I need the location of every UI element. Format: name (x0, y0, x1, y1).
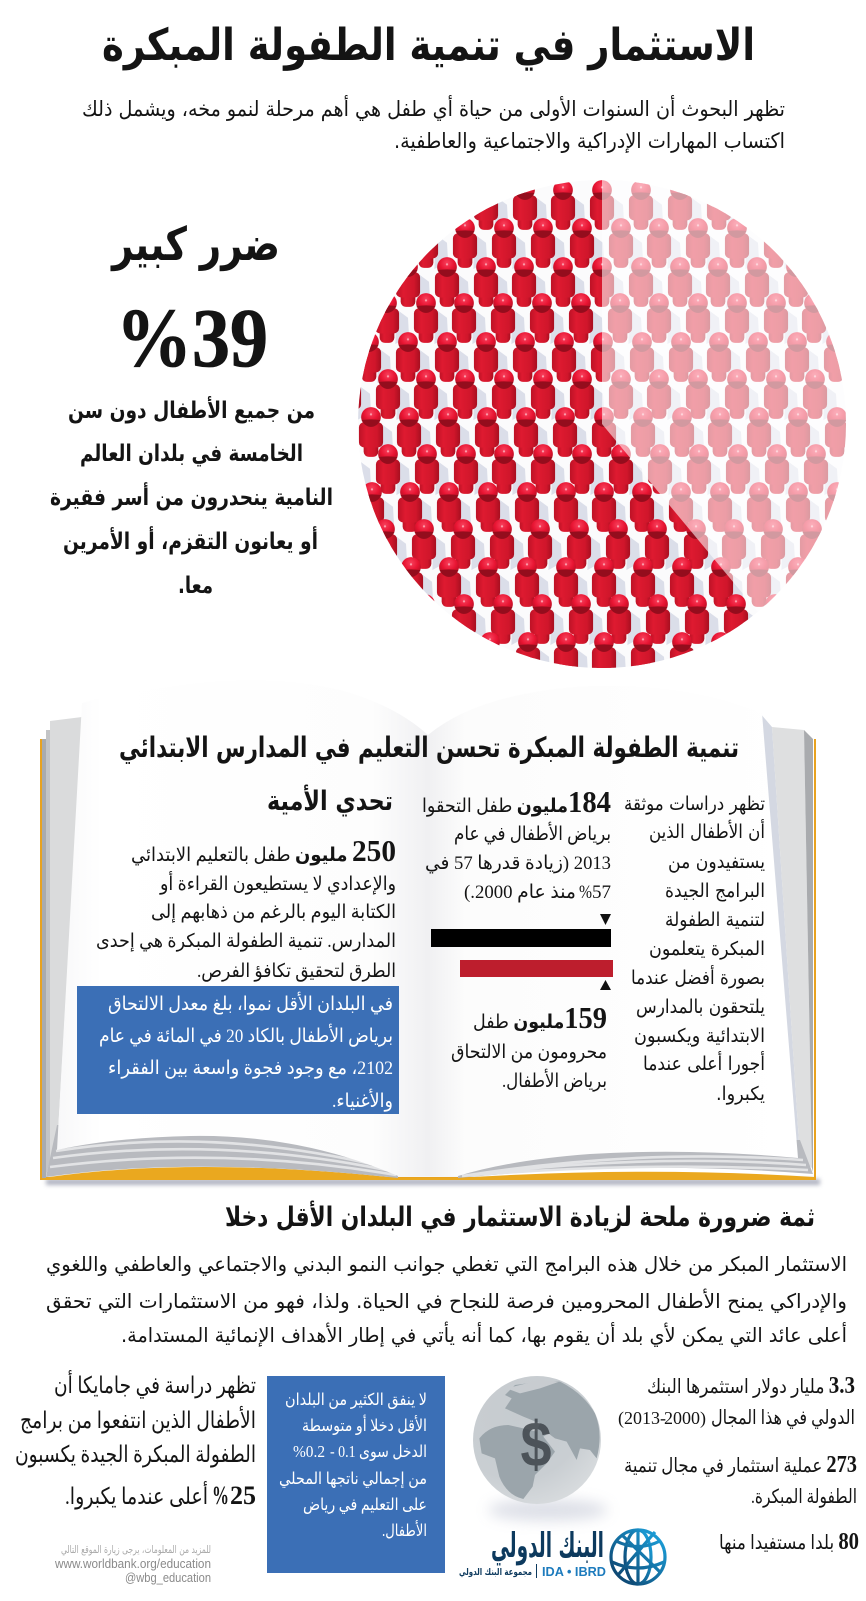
logo: World Bank (459, 1526, 665, 1584)
callout: low spending on preschool: الأقل دخلا أو متوسطة (302, 1414, 427, 1436)
column: documented studies: يلتحقون بالمدارس (636, 996, 765, 1018)
source and links: للمزيد من المعلومات، يرجى زيارة الموقع التالي (61, 1544, 211, 1556)
text block: 250 million children (96, 833, 396, 982)
column: 184 million enrolled: % (579, 882, 592, 903)
text block: World Bank statistics: 2000) (664, 1408, 706, 1429)
column: 159 million excluded: محرومون من الالتحاق (451, 1042, 607, 1063)
text block: Jamaica study: 25 (230, 1481, 256, 1510)
callout: least developed countries: برياض الأطفال بالكاد 20 في المائة في عام (99, 1024, 393, 1047)
text block: Jamaica study: تظهر دراسة في جامايكا أن (54, 1370, 256, 1399)
logo: World Bank: البنك الدولي (491, 1526, 604, 1566)
heading: severe harm: ضرر كبير (110, 217, 280, 271)
text block: Jamaica study: الطفولة المبكرة الجيدة يكسبون (15, 1442, 256, 1468)
text block: Jamaica study: الأطفال الذين انتفعوا من برامج (20, 1406, 256, 1434)
source and links: www.worldbank.org/education (54, 1556, 211, 1571)
logo: World Bank: IDA • IBRD (542, 1564, 606, 1579)
text block: 250 million children: الكتابة اليوم بالرغم من ذهابهم إلى (151, 902, 396, 924)
title: الاستثمار في تنمية الطفولة المبكرة (102, 20, 755, 71)
column: documented studies: أجورا أعلى عندما (643, 1051, 765, 1075)
callout: least developed countries (77, 986, 399, 1114)
callout: least developed countries: في البلدان الأقل نموا، بلغ معدل الالتحاق (108, 992, 393, 1015)
column: documented studies: تظهر دراسات موثقة (624, 793, 765, 815)
text block: stunting description: من جميع الأطفال دون سن (68, 395, 315, 424)
text block: stunting description: معا. (178, 573, 213, 599)
callout: low spending on preschool (267, 1376, 445, 1573)
column: 184 million enrolled: 2013 (زيادة قدرها 57 في (425, 853, 611, 874)
text block: Jamaica study: % (212, 1481, 229, 1510)
intro text: تظهر البحوث أن السنوات الأولى من حياة أي طفل هي أهم مرحلة لنمو مخه، ويشمل ذلك (82, 95, 785, 122)
column: 184 million enrolled: 57 (592, 882, 611, 903)
text block: 250 million children: الطرق لتحقيق تكافؤ الفرص. (197, 961, 396, 982)
callout: low spending on preschool: %0.2 (293, 1442, 325, 1461)
bar chart: enrolled versus excluded (431, 914, 613, 990)
text block: stunting description: الخامسة في بلدان العالم (80, 441, 303, 467)
text block: Jamaica study: أعلى عندما يكبروا. (65, 1481, 208, 1510)
callout: low spending on preschool: الأطفال. (382, 1520, 427, 1540)
column: documented studies: يستفيدون من (668, 851, 765, 873)
text block: 250 million children: المدارس. تنمية الطفولة المبكرة هي إحدى (96, 931, 396, 953)
intro text (82, 95, 785, 153)
column: 159 million excluded (451, 1000, 607, 1092)
pie chart: figures circle 39 percent (337, 180, 859, 683)
text block: World Bank statistics (618, 1373, 859, 1555)
column: 159 million excluded: برياض الأطفال. (502, 1069, 607, 1092)
icon: globe with dollar sign (473, 1376, 608, 1521)
callout: low spending on preschool: من إجمالي ناتجها المحلي (279, 1469, 427, 1489)
column: documented studies: يكبروا. (716, 1083, 765, 1105)
text block: 250 million children: والإعدادي لا يستطيعون القراءة أو (159, 871, 396, 895)
source and links (54, 1544, 211, 1585)
callout: low spending on preschool: الدخل سوى 0.1 - (330, 1442, 427, 1462)
column: documented studies: المبكرة يتعلمون (649, 938, 765, 960)
text block: 250 million children: 250 مليون طفل بالتعليم الابتدائي (131, 833, 396, 868)
text block: World Bank statistics: (2013- (618, 1408, 666, 1429)
column: 184 million enrolled (422, 784, 611, 903)
callout: low spending on preschool: لا ينفق الكثير من البلدان (285, 1390, 427, 1410)
column: documented studies: بصورة أفضل عندما (631, 965, 765, 989)
text block: early investment paragraph: والإدراكي يمنح الأطفال المحرومين فرصة للنجاح في الحياة. ولذا، فهو من الاستثمارات التي تحقق (46, 1289, 847, 1314)
text block: World Bank statistics: 3.3 مليار دولار استثمرها البنك (647, 1373, 855, 1399)
source and links: @wbg_education (125, 1570, 211, 1585)
column: 184 million enrolled: 184مليون طفل التحقوا (422, 784, 611, 819)
text block: early investment paragraph (46, 1252, 847, 1348)
callout: least developed countries: 2102، مع وجود فجوة واسعة بين الفقراء (108, 1058, 393, 1079)
callout: low spending on preschool: على التعليم في رياض (303, 1495, 427, 1515)
text block: early investment paragraph: أعلى عائد التي يمكن لأي بلد أن يقوم بها، كما أنه يأتي في إطار الأهداف الإنمائية المستدامة. (121, 1321, 847, 1348)
column: documented studies (624, 793, 765, 1105)
column: documented studies: الابتدائية ويكسبون (634, 1025, 765, 1047)
text block: World Bank statistics: 273 عملية استثمار في مجال تنمية (624, 1452, 857, 1478)
intro text: اكتساب المهارات الإدراكية والاجتماعية والعاطفية. (394, 129, 785, 153)
subheading: literacy challenge: تحدي الأمية (267, 784, 393, 817)
text block: early investment paragraph: الاستثمار المبكر من خلال هذه البرامج التي تغطي جوانب النمو البدني والاجتماعي والعاطفي واللغوي (46, 1252, 847, 1277)
illustration: open book (40, 680, 820, 1185)
text block: Jamaica study (15, 1370, 256, 1510)
text block: stunting description: النامية ينحدرون من أسر فقيرة (50, 481, 333, 511)
icon: globe with dollar sign: $ (520, 1408, 552, 1480)
text block: stunting description: أو يعانون التقزم، أو الأمرين (63, 525, 318, 555)
column: 184 million enrolled: برياض الأطفال في عام (454, 822, 611, 845)
text block: World Bank statistics: 80 بلدا مستفيدا منها (719, 1529, 859, 1555)
pie wedge: lighter 61 percent overlay (602, 180, 846, 612)
column: documented studies: لتنمية الطفولة (665, 909, 765, 931)
column: 184 million enrolled: منذ عام 2000.) (464, 882, 576, 903)
column: 159 million excluded: 159مليون طفل (473, 1000, 607, 1035)
column: documented studies: أن الأطفال الذين (649, 819, 765, 843)
column: documented studies: البرامج الجيدة (665, 880, 765, 902)
text block: stunting description (50, 395, 333, 599)
statistic: 39 percent: %39 (116, 292, 268, 385)
callout: least developed countries: والأغنياء. (332, 1089, 393, 1112)
logo: World Bank: مجموعة البنك الدولي (459, 1567, 532, 1578)
